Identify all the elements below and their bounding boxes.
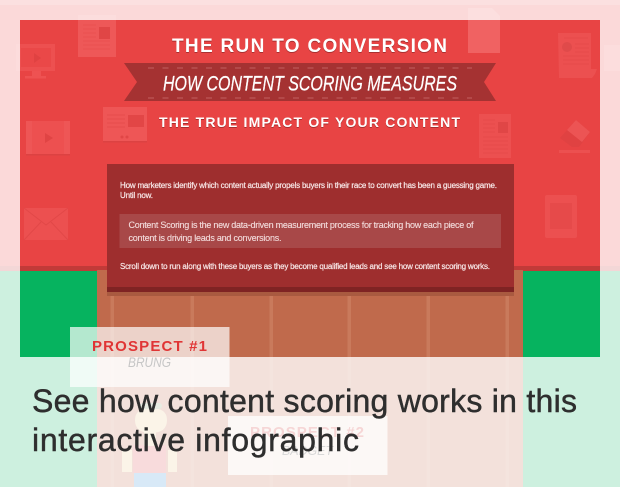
main heading (32, 383, 577, 458)
intro panel (107, 164, 514, 292)
title line: THE RUN TO CONVERSION (172, 36, 447, 57)
red header background (0, 0, 620, 270)
icon: document lines (479, 114, 511, 158)
running track (97, 270, 523, 487)
prospect 1 card background (70, 327, 230, 387)
title ribbon (124, 63, 496, 101)
text: highlighted definition line one: Content Scoring is the new data-driven measurement process for tracking how each piece of (128, 220, 474, 230)
icon: video film (26, 121, 70, 156)
header bottom edge (0, 266, 620, 271)
icon: monitor (16, 44, 55, 78)
icon: blank document (468, 8, 500, 53)
ribbon title: HOW CONTENT SCORING MEASURES (163, 72, 457, 96)
icon: monitor right (604, 45, 620, 71)
icon: envelope (24, 208, 68, 240)
text: scroll instruction: Scroll down to run along with these buyers as they become qualified leads and see how content scoring works. (120, 262, 490, 271)
prospect 2 name: BADGET (282, 443, 334, 458)
icon: browser page (103, 107, 147, 142)
icon: scroll with chart (558, 33, 597, 78)
icon: tablet (545, 195, 577, 238)
icon: eraser (559, 120, 590, 153)
text: intro line: How marketers identify which content actually propels buyers in their race to convert has been a guessing game. (120, 181, 497, 190)
icon: document with image (78, 15, 116, 57)
grass left (0, 271, 97, 487)
heading line two: interactive infographic (32, 422, 359, 458)
runner character (122, 403, 177, 487)
prospect 2 card (228, 416, 388, 475)
top pale strip (0, 0, 620, 5)
subtitle line: THE TRUE IMPACT OF YOUR CONTENT (159, 114, 460, 130)
text: highlighted definition line two: content is driving leads and conversions. (128, 233, 282, 243)
heading line one: See how content scoring works in this (32, 383, 577, 419)
grass right (523, 271, 620, 487)
text: until now: Until now. (120, 191, 153, 200)
prospect 1 name: BRUNG (128, 354, 171, 370)
prospect 1 label: PROSPECT #1 (92, 338, 207, 355)
prospect 2 label: PROSPECT #2 (250, 424, 364, 441)
panel shadow on track (107, 292, 514, 296)
